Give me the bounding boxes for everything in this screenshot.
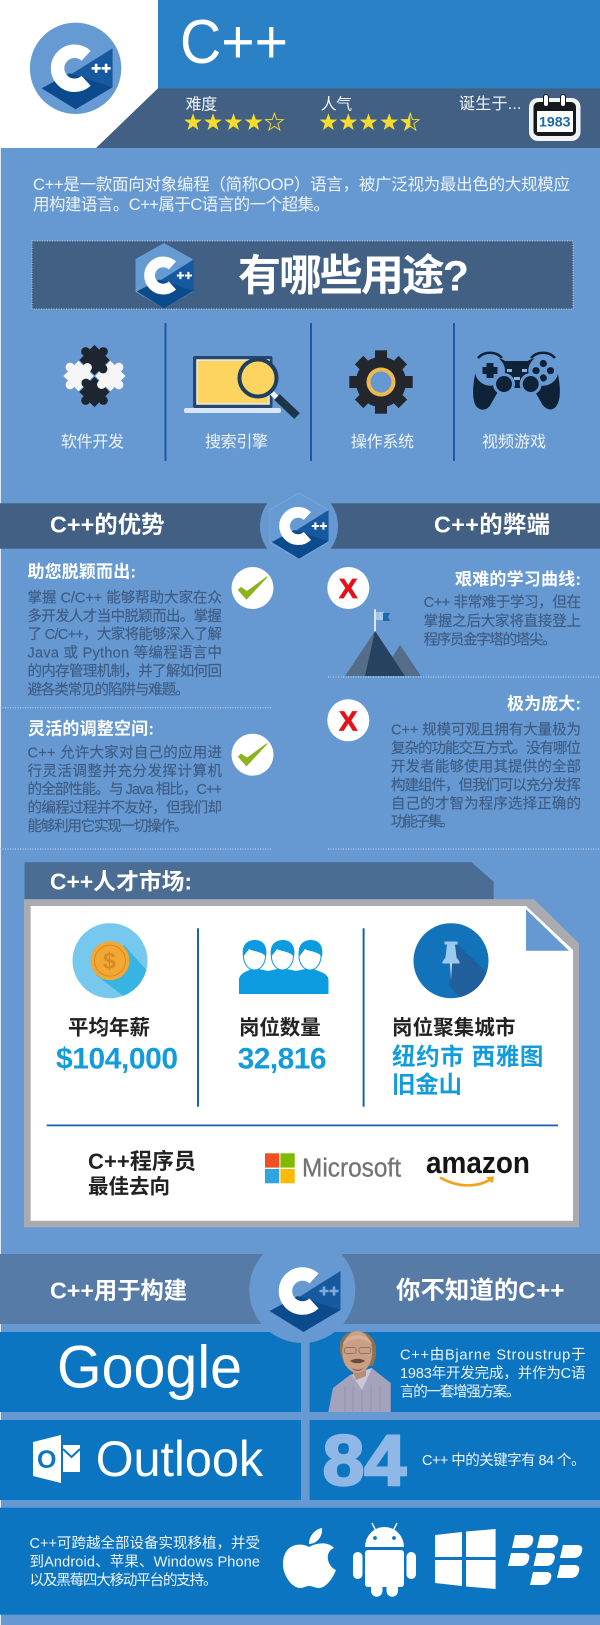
panel: advantage 1: 掌握 C/C++ 能够帮助大家在众 (28, 590, 222, 606)
panel: talent market (24, 862, 579, 1227)
icon: red x (327, 699, 369, 741)
panel: disadvantage 2: 极为庞大: (507, 695, 581, 714)
text: best destinations: C++程序员 (88, 1149, 196, 1174)
panel: disadvantage 2: 自己的才智为程序选择正确的 (391, 795, 581, 812)
stat: job count: 岗位数量 (239, 1016, 321, 1040)
stat: job cities: 纽约市 西雅图 (392, 1044, 543, 1070)
icon: C++ logo in circle (30, 23, 121, 114)
stat: job cities (392, 1016, 543, 1098)
panel: four uses (55, 323, 560, 461)
band: used to build and unknown facts heading (0, 1254, 600, 1324)
panel: advantage 2 (28, 718, 274, 835)
logo: Microsoft (265, 1153, 401, 1183)
icon: BlackBerry (508, 1535, 582, 1585)
icon: check mark (232, 734, 274, 776)
panel: disadvantage 2: 功能子集。 (391, 814, 454, 831)
intro text (33, 175, 570, 214)
big number 84: 84 (323, 1422, 407, 1501)
tile: Outlook: Outlook (96, 1431, 264, 1487)
panel: disadvantage 1: 程序员金字塔的塔尖。 (424, 632, 557, 649)
stat: average salary: $104,000 (56, 1042, 178, 1076)
icon: three people (239, 940, 328, 994)
logo: Microsoft: Microsoft (302, 1155, 401, 1183)
panel: disadvantage 1: 艰难的学习曲线: (455, 569, 581, 589)
panel: disadvantage 2: 开发者能够使用其提供的全部 (391, 757, 581, 775)
popularity rating (320, 96, 419, 130)
stat: job cities: 岗位聚集城市 (392, 1016, 516, 1040)
tile: Google (0, 1332, 301, 1412)
icon: calendar 1983: 1983 (539, 114, 571, 130)
icon: C++ hexagon logo (270, 493, 329, 559)
logo: amazon: amazon (426, 1145, 530, 1180)
icon: red x: X (339, 705, 358, 736)
icon: puzzle (55, 336, 134, 416)
tile: 84 keywords: C++ 中的关键字有 84 个。 (422, 1452, 586, 1469)
tile: Google: Google (57, 1334, 242, 1400)
icon: Outlook (33, 1435, 80, 1483)
stat: job count (238, 1016, 327, 1076)
stat: average salary: 平均年薪 (68, 1017, 150, 1040)
icon: dollar coin (72, 923, 148, 998)
text: platform support (30, 1534, 260, 1589)
panel: advantage 1: 多开发人才当中脱颖而出。掌握 (28, 608, 222, 625)
tile: Bjarne Stroustrup fact (310, 1331, 600, 1412)
panel: advantage 2: 能够利用它实现一切操作。 (28, 817, 188, 835)
tile: Bjarne Stroustrup fact: C++由Bjarne Stroustrup于 (400, 1346, 586, 1364)
stat: job count: 32,816 (238, 1042, 327, 1076)
icon: dollar coin: $ (103, 948, 116, 974)
difficulty rating (184, 96, 283, 130)
panel: disadvantage 2: C++ 规模可观且拥有大量极为 (391, 722, 581, 739)
icon: large C++ logo in circle (249, 1237, 355, 1343)
text: best destinations (88, 1149, 196, 1198)
label: operating system: 操作系统 (351, 433, 414, 451)
icon: Outlook: O (37, 1446, 56, 1474)
text: best destinations: 最佳去向 (88, 1175, 170, 1198)
panel: disadvantage 2: 构建组件，但我们可以充分发挥 (391, 777, 581, 794)
tile: Bjarne Stroustrup fact: 言的一套增强方案。 (400, 1382, 520, 1400)
born in label: 诞生于... (459, 95, 522, 113)
panel: advantage 2: 的编程过程并不友好，但我们却 (28, 800, 222, 816)
intro text: 用构建语言。C++属于C语言的一个超集。 (33, 195, 330, 214)
stat: job cities: 旧金山 (392, 1070, 462, 1098)
panel: disadvantage 2: 复杂的功能交互方式。没有哪位 (391, 739, 581, 757)
panel: disadvantage 1 (327, 567, 581, 676)
panel: disadvantage 1: C++ 非常难于学习，但在 (424, 594, 581, 611)
icon: calendar 1983 (529, 94, 580, 141)
intro text: C++是一款面向对象编程（简称OOP）语言，被广泛视为最出色的大规模应 (33, 175, 570, 194)
icon: game controller (473, 353, 560, 410)
panel: advantage 2: 行灵活调整并充分发挥计算机 (28, 763, 222, 780)
panel: what is it used for heading (32, 241, 573, 309)
panel: advantage 2: 的全部性能。与 Java 相比，C++ (28, 780, 222, 798)
icon: Android (353, 1523, 416, 1597)
stat: average salary (56, 1017, 178, 1076)
panel: advantage 1: 助您脱颖而出: (28, 562, 136, 582)
band: pros and cons heading (0, 487, 600, 565)
panel: advantage 1: 的内存管理机制，并了解如何回 (28, 663, 222, 680)
icon: laptop with magnifier (184, 356, 297, 416)
text: platform support: 到Android、苹果、Windows Phone (30, 1553, 260, 1570)
label: search engine: 搜索引擎 (205, 433, 268, 451)
popularity rating: 人气 (321, 96, 352, 114)
title: C++ (180, 8, 288, 77)
paper card (24, 899, 579, 1227)
panel: advantage 2: 灵活的调整空间: (28, 718, 154, 738)
tile: Outlook (0, 1420, 301, 1500)
icon: C++ hexagon logo (136, 243, 194, 308)
panel: disadvantage 1: 掌握之后大家将直接登上 (424, 613, 581, 630)
panel: advantage 2: C++ 允许大家对自己的应用进 (28, 744, 222, 762)
tile: Bjarne Stroustrup fact: 1983年开发完成，并作为C语 (400, 1365, 586, 1382)
icon: red x (327, 567, 369, 609)
panel: advantage 1: 避各类常见的陷阱与难题。 (28, 682, 190, 698)
icon: gear (349, 350, 413, 414)
heading tab (24, 862, 494, 899)
panel: advantage 1: Java 或 Python 等编程语言中 (28, 644, 222, 662)
icon: Windows (435, 1529, 496, 1589)
panel: disadvantage 2 (327, 695, 581, 831)
icon: Apple (283, 1528, 336, 1588)
icon: mountain with flag (345, 609, 421, 676)
text: platform support: C++可跨越全部设备实现移植，并受 (30, 1534, 260, 1552)
icon: check mark (232, 567, 274, 609)
panel: advantage 1 (28, 562, 274, 698)
difficulty rating: 难度 (186, 96, 217, 114)
heading text: 有哪些用途? (238, 252, 469, 300)
panel: advantage 1: 了 C/C++，大家将能够深入了解 (28, 626, 222, 643)
label: software development: 软件开发 (61, 433, 124, 451)
text: platform support: 以及黑莓四大移动平台的支持。 (30, 1572, 218, 1589)
heading: disadvantages: C++的弊端 (434, 512, 550, 538)
header banner (0, 0, 600, 148)
icon: map pin (414, 923, 488, 998)
tile: mobile platforms (0, 1508, 600, 1615)
label: video games: 视频游戏 (482, 433, 546, 451)
heading: used to build: C++用于构建 (50, 1278, 187, 1304)
heading: advantages: C++的优势 (50, 512, 164, 538)
icon: red x: X (339, 573, 358, 604)
photo: Bjarne Stroustrup (328, 1331, 391, 1412)
tile: 84 keywords (310, 1420, 600, 1501)
heading: what you did not know: 你不知道的C++ (396, 1278, 564, 1305)
heading tab: C++人才市场: (50, 869, 192, 895)
